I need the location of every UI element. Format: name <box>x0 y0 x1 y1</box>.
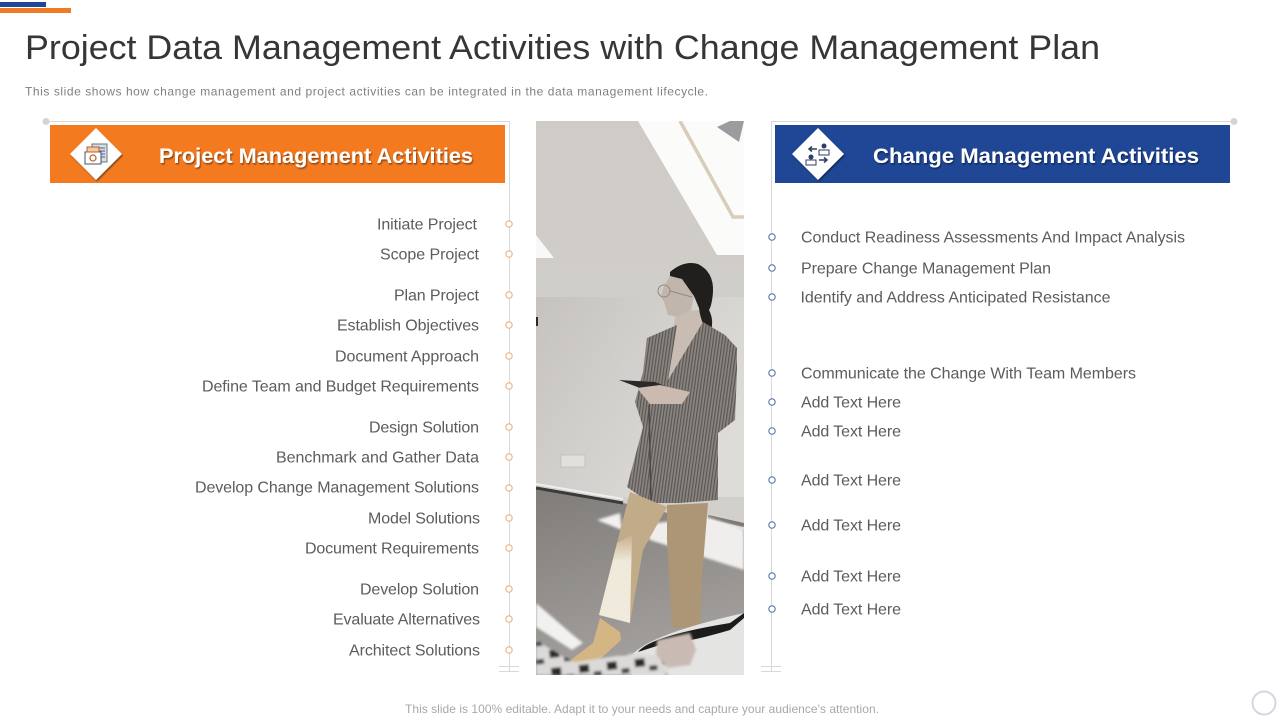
item: Prepare Change Management Plan <box>801 260 1051 278</box>
title: Project Data Management Activities with Change Management Plan <box>25 29 1100 67</box>
list: project activities <box>195 216 512 660</box>
item: Benchmark and Gather Data <box>276 450 479 466</box>
item: Scope Project <box>380 246 480 264</box>
top accent bars <box>0 2 71 13</box>
blue banner <box>775 125 1230 183</box>
item: Define Team and Budget Requirements <box>202 378 479 396</box>
banner heading: Change Management Activities <box>873 145 1199 168</box>
item: Design Solution <box>369 420 479 436</box>
item: Evaluate Alternatives <box>333 612 480 628</box>
item: Document Approach <box>335 348 479 366</box>
hair <box>670 263 713 330</box>
tablet and hands <box>619 380 670 388</box>
foreground person <box>632 613 744 675</box>
item: Plan Project <box>394 288 480 304</box>
item: Add Text Here <box>801 472 901 490</box>
photo: woman holding tablet <box>536 121 744 675</box>
panel: change management activities <box>761 118 1238 672</box>
face <box>661 276 694 317</box>
item: Identify and Address Anticipated Resistance <box>800 290 1111 306</box>
corner circle <box>1252 692 1276 714</box>
item: Communicate the Change With Team Members <box>801 366 1136 382</box>
item: Add Text Here <box>801 602 901 618</box>
panel: project management activities <box>42 118 519 672</box>
item: Add Text Here <box>801 424 901 440</box>
item: Add Text Here <box>801 394 901 412</box>
item: Document Requirements <box>305 540 479 558</box>
left panel frame <box>42 118 519 672</box>
neck and shirt <box>668 310 703 380</box>
shoe <box>570 618 621 663</box>
item: Establish Objectives <box>337 318 479 334</box>
jacket <box>627 322 737 503</box>
item: Develop Change Management Solutions <box>195 480 479 496</box>
list: change activities <box>769 230 1185 618</box>
orange banner <box>50 125 505 183</box>
subtitle: This slide shows how change management and project activities can be integrated in the data management lifecycle. <box>25 84 708 98</box>
icon: documents in diamond <box>70 128 122 180</box>
banner heading: Project Management Activities <box>159 145 473 168</box>
item: Architect Solutions <box>349 642 480 660</box>
item: Conduct Readiness Assessments And Impact Analysis <box>801 230 1185 246</box>
right panel frame <box>761 118 1238 672</box>
item: Initiate Project <box>377 216 478 234</box>
item: Add Text Here <box>801 568 901 586</box>
footer note: This slide is 100% editable. Adapt it to your needs and capture your audience's attention. <box>405 702 879 716</box>
glasses <box>658 285 692 297</box>
icon: people exchange in diamond <box>792 128 844 180</box>
item: Model Solutions <box>368 510 480 528</box>
item: Develop Solution <box>360 582 479 598</box>
item: Add Text Here <box>801 518 901 534</box>
trousers <box>599 492 667 623</box>
